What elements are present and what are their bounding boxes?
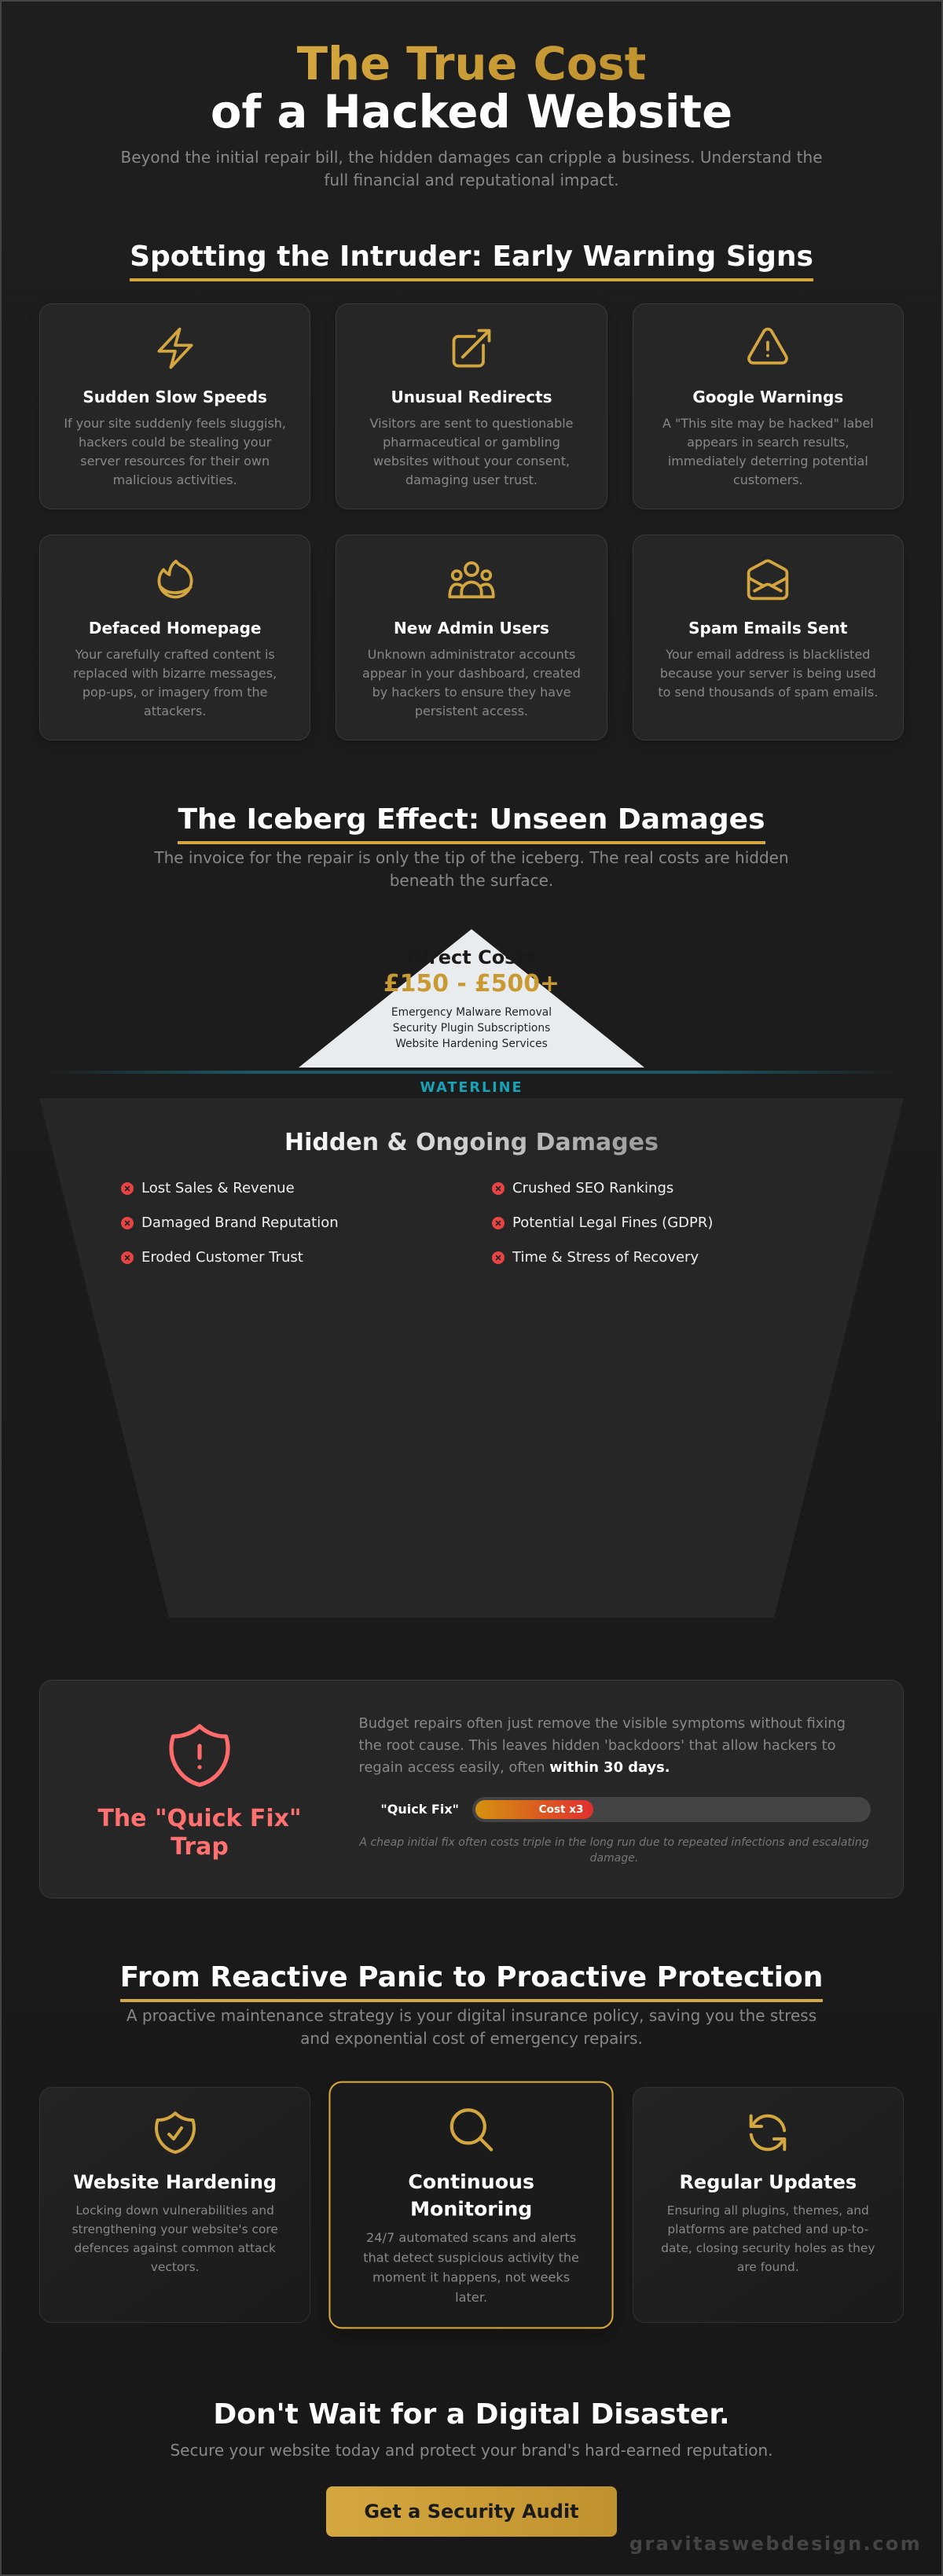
hidden damages heading: Hidden & Ongoing Damages — [284, 1129, 659, 1156]
card text: by hackers to ensure they have — [372, 685, 571, 700]
card text: server resources for their own — [80, 454, 270, 469]
hidden damages list: Eroded Customer Trust — [141, 1249, 303, 1266]
card text: later. — [455, 2290, 487, 2305]
proactive intro text: and exponential cost of emergency repairs. — [300, 2028, 643, 2047]
card text: hackers could be stealing your — [79, 435, 271, 450]
panel: new admin users — [336, 535, 607, 740]
card text — [363, 2231, 579, 2305]
item — [492, 1249, 699, 1266]
trap title: Trap — [171, 1833, 229, 1861]
panel: website hardening — [39, 2087, 310, 2323]
heading: iceberg effect: The Iceberg Effect: Unseen Damages — [178, 803, 765, 836]
card title: Regular Updates — [679, 2171, 857, 2193]
item — [492, 1215, 713, 1231]
card text — [662, 416, 874, 487]
iceberg intro text: beneath the surface. — [390, 871, 553, 890]
title — [211, 38, 732, 138]
cost bar fill: Cost x3 — [539, 1803, 583, 1816]
direct costs value: £150 - £500+ — [383, 970, 560, 998]
card text — [658, 647, 878, 700]
watermark: gravitaswebdesign.com — [629, 2533, 922, 2555]
card text: If your site suddenly feels sluggish, — [64, 416, 286, 431]
waterline label: WATERLINE — [420, 1080, 523, 1096]
trap text: regain access easily, often within 30 days. — [358, 1759, 670, 1776]
icon: user group — [448, 561, 495, 599]
iceberg tip triangle — [299, 929, 644, 1068]
card text: malicious activities. — [113, 472, 237, 487]
card text — [362, 647, 581, 718]
icon: shield warning — [169, 1724, 230, 1788]
trap caption: damage. — [590, 1852, 638, 1865]
call to action heading: Don't Wait for a Digital Disaster. — [213, 2398, 730, 2431]
cost bar label: "Quick Fix" — [380, 1802, 459, 1817]
card text: attackers. — [144, 704, 206, 718]
icon: magnifying glass — [449, 2108, 494, 2152]
card text: Visitors are sent to questionable — [369, 416, 574, 431]
card text: platforms are patched and up-to- — [667, 2222, 868, 2236]
panel: sudden slow speeds — [39, 303, 310, 509]
card text — [72, 2203, 278, 2274]
trap text: the root cause. This leaves hidden 'backdoors' that allow hackers to — [358, 1737, 836, 1754]
direct costs label: Direct Costs — [407, 946, 536, 968]
card title: New Admin Users — [394, 619, 549, 638]
item — [492, 1180, 673, 1196]
hidden damages list: Lost Sales & Revenue — [141, 1180, 295, 1196]
card title: Defaced Homepage — [89, 619, 261, 638]
subtitle — [121, 148, 822, 189]
underwater trapezoid — [39, 1098, 904, 1618]
card text: customers. — [733, 472, 803, 487]
panel: quick fix trap — [39, 1680, 904, 1898]
hidden damages list: Time & Stress of Recovery — [512, 1249, 699, 1266]
trap caption — [358, 1836, 869, 1865]
icon: flame — [157, 560, 193, 599]
title: The True Cost — [297, 38, 646, 90]
button: get a security audit: Get a Security Audit — [364, 2501, 579, 2523]
card text — [369, 416, 574, 487]
direct costs list: Security Plugin Subscriptions — [393, 1022, 550, 1034]
card text: vectors. — [151, 2260, 200, 2274]
trap text: Budget repairs often just remove the visible symptoms without fixing — [358, 1715, 846, 1732]
card title: Sudden Slow Speeds — [83, 388, 267, 406]
direct costs list: Emergency Malware Removal — [391, 1006, 552, 1019]
hidden damages list: Potential Legal Fines (GDPR) — [512, 1215, 713, 1231]
card title: Monitoring — [410, 2198, 533, 2221]
card text: A "This site may be hacked" label — [662, 416, 874, 431]
card text: strengthening your website's core — [72, 2222, 278, 2236]
cost bar — [472, 1797, 871, 1822]
card text: are found. — [737, 2260, 799, 2274]
call to action text: Secure your website today and protect your brand's hard-earned reputation. — [170, 2441, 773, 2460]
card text — [64, 416, 286, 487]
item — [121, 1249, 303, 1266]
icon: warning triangle — [747, 327, 788, 365]
waterline — [39, 1071, 904, 1074]
panel: defaced homepage — [39, 535, 310, 740]
trap caption: A cheap initial fix often costs triple in the long run due to repeated infections and escalating — [359, 1836, 869, 1849]
card text: pop-ups, or imagery from the — [83, 685, 267, 700]
hidden damages list: Crushed SEO Rankings — [512, 1180, 673, 1196]
card text: damaging user trust. — [405, 472, 538, 487]
card text: websites without your consent, — [373, 454, 570, 469]
trap text — [358, 1715, 846, 1776]
card text — [661, 2203, 875, 2274]
iceberg intro text: The invoice for the repair is only the tip of the iceberg. The real costs are hidden — [154, 848, 789, 867]
card text: Ensuring all plugins, themes, and — [667, 2203, 869, 2218]
card title: Unusual Redirects — [391, 388, 552, 406]
card text: Locking down vulnerabilities and — [75, 2203, 274, 2218]
card text: date, closing security holes as they — [661, 2241, 875, 2255]
card text: replaced with bizarre messages, — [73, 666, 277, 681]
hidden damages list — [121, 1180, 713, 1266]
card text: Your email address is blacklisted — [666, 647, 870, 662]
panel: regular updates — [633, 2087, 904, 2323]
card title: Spam Emails Sent — [688, 619, 847, 638]
card title: Google Warnings — [692, 388, 843, 406]
card text: moment it happens, not weeks — [372, 2270, 570, 2285]
direct costs list: Website Hardening Services — [395, 1038, 548, 1050]
card text: because your server is being used — [660, 666, 876, 681]
subtitle: full financial and reputational impact. — [324, 170, 619, 189]
subtitle: Beyond the initial repair bill, the hidden damages can cripple a business. Understand the — [121, 148, 822, 167]
panel: google warnings — [633, 303, 904, 509]
card text: appears in search results, — [687, 435, 849, 450]
card text: persistent access. — [415, 704, 528, 718]
button: get a security audit — [326, 2486, 617, 2537]
card text: Unknown administrator accounts — [368, 647, 575, 662]
trap title: The "Quick Fix" — [97, 1805, 302, 1832]
panel: continuous monitoring — [329, 2082, 614, 2328]
item — [121, 1215, 339, 1231]
direct costs list — [391, 1006, 552, 1050]
title: of a Hacked Website — [211, 86, 732, 138]
card text: Your carefully crafted content is — [75, 647, 275, 662]
card text: appear in your dashboard, created — [362, 666, 581, 681]
icon: external link — [453, 329, 490, 368]
card text: defences against common attack — [74, 2241, 276, 2255]
item — [121, 1180, 295, 1196]
card title: Continuous — [409, 2170, 534, 2193]
heading: proactive protection: From Reactive Panic to Proactive Protection — [120, 1961, 823, 1994]
trap title — [97, 1805, 302, 1861]
iceberg intro text — [154, 848, 789, 890]
icon: shield check — [155, 2111, 196, 2154]
card text — [73, 647, 277, 718]
card text: to send thousands of spam emails. — [658, 685, 878, 700]
icon: refresh arrows — [750, 2115, 786, 2151]
card title — [409, 2170, 534, 2221]
hidden damages list: Damaged Brand Reputation — [141, 1215, 339, 1231]
iceberg tip text — [383, 946, 560, 1050]
card text: 24/7 automated scans and alerts — [366, 2231, 577, 2245]
panel: unusual redirects — [336, 303, 607, 509]
icon: lightning bolt — [157, 327, 193, 369]
card text: pharmaceutical or gambling — [383, 435, 560, 450]
cost bar fill — [475, 1800, 593, 1819]
heading: early warning signs: Spotting the Intruder: Early Warning Signs — [130, 241, 813, 273]
panel: spam emails sent — [633, 535, 904, 740]
icon: open envelope — [747, 560, 789, 601]
proactive intro text: A proactive maintenance strategy is your digital insurance policy, saving you the stress — [127, 2006, 816, 2025]
card title: Website Hardening — [73, 2171, 277, 2193]
card text: that detect suspicious activity the — [364, 2251, 579, 2265]
card text: immediately deterring potential — [668, 454, 868, 469]
proactive intro text — [127, 2006, 816, 2047]
